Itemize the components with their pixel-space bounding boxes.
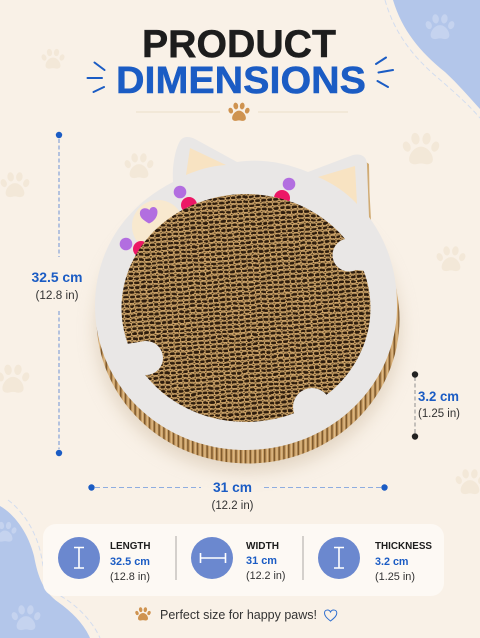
decorative paw prints: [0, 48, 480, 494]
dimension: length: [32, 132, 82, 456]
left ear inner: [186, 148, 226, 175]
length item: [58, 537, 150, 583]
length inches: (12.8 in): [36, 290, 79, 302]
width item: (12.2 in): [246, 570, 286, 582]
length item: 32.5 cm: [110, 556, 150, 568]
icon: paw: [135, 607, 151, 620]
product: cat scratcher board: [95, 137, 400, 472]
divider: [176, 536, 303, 580]
heart: [140, 207, 158, 224]
icon: vertical measure: [334, 548, 344, 568]
cheek: [132, 200, 184, 252]
thickness inches: (1.25 in): [418, 408, 460, 420]
icon: horizontal measure: [200, 553, 226, 563]
thickness item: 3.2 cm: [375, 556, 409, 568]
icon: heart: [324, 610, 337, 621]
thickness item: (1.25 in): [375, 571, 415, 583]
ground shadow: [96, 188, 400, 472]
blue corner: top right: [385, 0, 480, 118]
pink cheeks: [133, 190, 290, 257]
title divider with paw: [136, 102, 348, 121]
tagline: Perfect size for happy paws!: [160, 608, 317, 622]
thickness item: [318, 537, 432, 583]
thickness item: THICKNESS: [375, 541, 432, 552]
icon: vertical measure: [74, 548, 84, 568]
width value: 31 cm: [213, 479, 252, 495]
thickness value: 3.2 cm: [418, 388, 459, 404]
dimension: width: [88, 479, 388, 512]
right ear inner: [318, 166, 357, 204]
purple dots: [120, 178, 295, 250]
width item: 31 cm: [246, 555, 277, 567]
title line: product: PRODUCT: [142, 23, 336, 66]
title accent rays: [88, 58, 393, 92]
width inches: (12.2 in): [212, 500, 254, 512]
blue corner: bottom left: [0, 500, 100, 638]
thumb notches: [118, 238, 378, 432]
title line: dimensions: DIMENSIONS: [116, 60, 366, 102]
dimension: thickness: [412, 371, 460, 440]
width item: [191, 537, 286, 582]
title: [116, 23, 366, 102]
corrugated side edge: [96, 162, 400, 464]
width item: WIDTH: [246, 541, 279, 552]
summary panel: [43, 524, 444, 596]
length item: LENGTH: [110, 541, 150, 552]
white top surface with ears: [95, 137, 397, 450]
corrugated centre: [115, 188, 377, 428]
length value: 32.5 cm: [32, 269, 82, 285]
length item: (12.8 in): [110, 571, 150, 583]
